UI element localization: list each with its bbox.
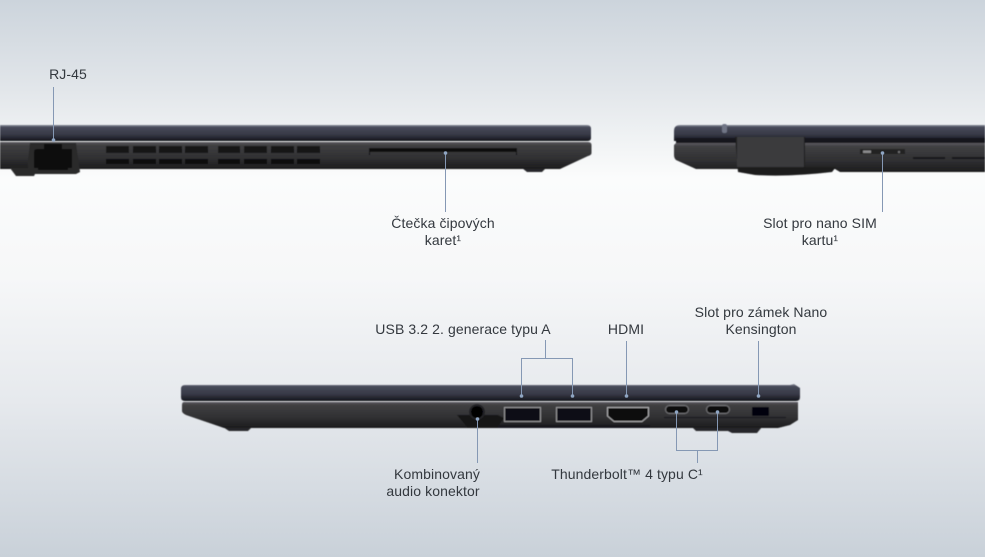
base — [182, 402, 798, 428]
SIM slot — [860, 149, 905, 154]
label: audio: Kombinovaný — [394, 466, 480, 482]
Thunderbolt ports — [666, 406, 730, 414]
label: audio: audio konektor — [386, 483, 480, 499]
vents bottom row — [106, 159, 320, 164]
dark base under USB and HDMI — [498, 425, 650, 428]
laptop: front view — [674, 124, 985, 176]
laptop: side view — [181, 384, 800, 433]
vent strips — [913, 157, 985, 159]
label: HDMI: HDMI — [608, 321, 644, 337]
smart card slot — [369, 148, 517, 155]
lid — [674, 125, 985, 141]
audio jack — [457, 404, 504, 428]
RJ-45 port — [10, 143, 80, 176]
label: Kensington: Slot pro zámek Nano — [695, 304, 827, 320]
hinge block — [735, 137, 836, 176]
lid — [0, 125, 591, 141]
lid — [181, 384, 800, 401]
laptop: rear view — [0, 125, 592, 176]
USB ports — [504, 408, 592, 422]
label: Kensington: Kensington — [725, 321, 797, 337]
foot — [223, 427, 252, 431]
label: RJ-45: RJ-45 — [49, 66, 87, 82]
label: USB: USB 3.2 2. generace typu A — [375, 321, 551, 337]
callout lines — [54, 87, 882, 463]
base — [0, 142, 592, 169]
label: Thunderbolt: Thunderbolt™ 4 typu C¹ — [551, 466, 703, 482]
HDMI port — [608, 408, 648, 422]
label: smart card reader: Čtečka čipových — [391, 215, 495, 231]
foot — [522, 168, 546, 172]
label: nano SIM: Slot pro nano SIM — [763, 215, 877, 231]
label: smart card reader: karet¹ — [425, 232, 461, 248]
vents top row — [106, 146, 320, 153]
base — [674, 143, 985, 172]
Kensington slot — [752, 407, 769, 416]
label: nano SIM: kartu¹ — [802, 232, 838, 248]
callout dots — [52, 138, 884, 421]
